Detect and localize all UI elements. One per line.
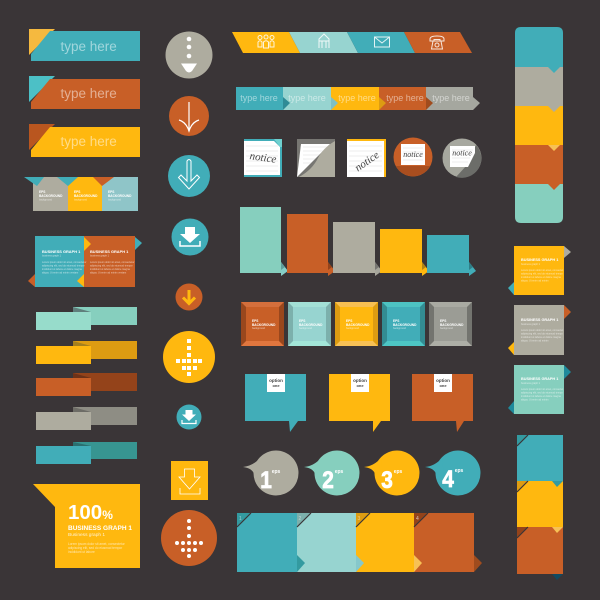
panel: yellow business graph card: BUSINESS GRAPH 1 xyxy=(521,258,558,262)
icon: yellow square outline download xyxy=(171,461,208,500)
ribbon: orange type here: type here xyxy=(60,86,117,101)
bevel square: mint: background xyxy=(299,327,313,330)
speech box: teal option one: one xyxy=(272,383,280,388)
two-column business graph panel: business graph 1 xyxy=(42,254,62,258)
panel: yellow business graph card xyxy=(508,246,571,295)
numbered bubble 4: eps xyxy=(455,468,464,474)
chevron type here band: type here xyxy=(338,93,376,103)
numbered bubble 1 xyxy=(243,450,298,496)
chevron type here band: type here xyxy=(432,93,470,103)
three-column EPS background strip: background xyxy=(39,198,53,202)
ribbon: yellow type here: type here xyxy=(60,134,117,149)
panel: yellow business graph card: business graph 1 xyxy=(521,263,541,266)
bevel square: yellow: background xyxy=(346,327,360,330)
three-column EPS background strip xyxy=(24,177,138,211)
three-column EPS background strip: background xyxy=(108,198,122,202)
two-column business graph panel: BUSINESS GRAPH 1 xyxy=(90,249,129,254)
bevel square: orange: EPS xyxy=(252,319,258,323)
note: grey circle notice: notice xyxy=(452,148,472,158)
icon: small orange circle yellow arrow xyxy=(176,284,202,310)
numbered bubble 3: eps xyxy=(394,469,403,475)
two-column business graph panel: adipiscing elit, sed do eiusmod tempor xyxy=(90,264,133,268)
panel: yellow business graph card: Lorem ipsum dolor sit amet, consectet xyxy=(521,269,564,272)
bevel square: orange: background xyxy=(252,327,266,330)
icon: envelope xyxy=(374,37,390,47)
icon: teal circle outline arrow xyxy=(168,155,210,197)
two-column business graph panel: incididunt ut labore et dolore magna xyxy=(90,268,130,271)
icon: people xyxy=(258,35,274,48)
panel: mint business graph card xyxy=(508,365,571,414)
panel: mint business graph card: adipiscing elit, sed do eiusmod tempo xyxy=(521,392,563,394)
panel: yellow business graph card: aliqua. Ut enim ad minim xyxy=(521,280,549,282)
panel: mint business graph card: business graph 1 xyxy=(521,382,541,385)
panel: mint business graph card: aliqua. Ut enim ad minim xyxy=(521,398,549,402)
icon: teal circle download xyxy=(172,218,208,256)
speech box: orange option one xyxy=(412,374,473,432)
panel: mint business graph card: BUSINESS GRAPH 1 xyxy=(521,377,558,381)
note: yellow square notice xyxy=(347,139,386,177)
three-column EPS background strip: EPS xyxy=(108,190,114,194)
panel: grey business graph card: Lorem ipsum dolor sit amet, consectet xyxy=(521,329,564,332)
bar chart: descending folded columns xyxy=(240,207,476,276)
icon: orange circle thin arrow xyxy=(169,96,209,136)
numbered bubble 1: eps xyxy=(272,469,281,475)
numbered bubble 2 xyxy=(304,450,360,496)
panel: yellow business graph card: incididunt ut labore et dolore magna xyxy=(521,276,561,279)
three-column EPS background strip: BACKGROUND xyxy=(74,194,98,198)
two-column business graph panel: aliqua. Ut enim ad minim veniam xyxy=(90,272,126,274)
three-column EPS background strip: EPS xyxy=(74,190,80,194)
icon: grey circle dotted arrow xyxy=(166,32,212,78)
bevel square: yellow: BACKGROUND xyxy=(346,323,370,327)
ribbon: teal type here: type here xyxy=(60,39,117,54)
numbered bubble 3: 3 xyxy=(381,465,393,493)
bevelled squares row xyxy=(241,302,472,346)
bevel square: grey: BACKGROUND xyxy=(440,323,464,327)
panel: 100% business graph: adipiscing elit, sed do eiusmod tempor xyxy=(68,546,123,550)
panel: grey business graph card: business graph 1 xyxy=(521,323,541,326)
bevel square: mint: EPS xyxy=(299,319,305,323)
bevel square: yellow: EPS xyxy=(346,319,352,323)
chevron type here band: type here xyxy=(240,93,278,103)
speech box: orange option one: option xyxy=(436,378,450,383)
icon: orange circle dotted arrow xyxy=(161,510,217,566)
bevel square: orange xyxy=(241,302,284,346)
bevel square: grey: background xyxy=(440,327,454,330)
panel: 100% business graph: Lorem ipsum dolor sit amet, consectetur xyxy=(68,542,126,546)
vertical rounded stacked strip xyxy=(515,27,563,223)
two-column business graph panel: business graph 1 xyxy=(90,254,110,258)
two-column business graph panel: Lorem ipsum dolor sit amet, consectetur xyxy=(90,261,135,264)
bevel square: mint xyxy=(288,302,331,346)
speech box: yellow option one: one xyxy=(356,383,364,388)
bevel square: grey xyxy=(429,302,472,346)
numbered bubble 2: eps xyxy=(335,469,344,475)
numbered bubble 4 xyxy=(425,450,480,496)
note: teal square notice: notice xyxy=(249,150,277,166)
speech box: yellow option one xyxy=(329,374,390,432)
three-column EPS background strip: background xyxy=(74,198,88,202)
icon: telephone xyxy=(430,36,444,49)
speech box: teal option one: option xyxy=(269,378,283,383)
panel: 100% business graph xyxy=(33,484,140,568)
panel: grey business graph card: aliqua. Ut enim ad minim xyxy=(521,340,549,342)
numbered bubble 1: 1 xyxy=(260,465,272,493)
bevel square: teal xyxy=(382,302,425,346)
ribbon: yellow type here xyxy=(29,124,140,157)
bevel square: mint: BACKGROUND xyxy=(299,323,323,327)
note: orange circle notice: notice xyxy=(403,150,423,159)
three-column EPS background strip: BACKGROUND xyxy=(39,194,63,198)
note: yellow square notice: notice xyxy=(353,149,382,174)
note: orange circle notice xyxy=(394,138,432,176)
two-column business graph panel: incididunt ut labore et dolore magna xyxy=(42,268,82,271)
panel: 100% business graph: incididunt ut labore xyxy=(68,550,95,554)
parallelogram icon band xyxy=(232,32,472,53)
three-column EPS background strip: BACKGROUND xyxy=(108,194,132,198)
two-column business graph panel: Lorem ipsum dolor sit amet, consectetur xyxy=(42,261,87,264)
speech box: orange option one: one xyxy=(439,383,447,388)
speech box: yellow option one: option xyxy=(353,378,367,383)
icon: house xyxy=(319,34,329,48)
bevel square: grey: EPS xyxy=(440,319,446,323)
folded ribbons stack xyxy=(36,307,137,464)
panel: mint business graph card: Lorem ipsum dolor sit amet, consectet xyxy=(521,388,564,391)
horizontal numbered tabs: 4 xyxy=(416,516,419,522)
two-column business graph panel: adipiscing elit, sed do eiusmod tempor xyxy=(42,264,85,268)
two-column business graph panel: BUSINESS GRAPH 1 xyxy=(42,249,81,254)
panel: grey business graph card: BUSINESS GRAPH 1 xyxy=(521,318,558,322)
horizontal numbered tabs: 3 xyxy=(358,516,360,522)
chevron type here band: type here xyxy=(386,93,424,103)
ribbon: orange type here xyxy=(29,76,140,109)
note: teal square notice xyxy=(244,139,282,177)
vertical numbered tabs xyxy=(517,435,563,580)
numbered bubble 2: 2 xyxy=(322,465,334,493)
bevel square: teal: BACKGROUND xyxy=(393,323,417,327)
bevel square: yellow xyxy=(335,302,378,346)
panel: grey business graph card: adipiscing elit, sed do eiusmod tempo xyxy=(521,332,563,336)
bevel square: teal: EPS xyxy=(393,319,399,323)
bevel square: teal: background xyxy=(393,327,407,330)
panel: mint business graph card: incididunt ut labore et dolore magna xyxy=(521,395,561,398)
panel: 100% business graph: 100% xyxy=(68,501,113,524)
chevron type here band xyxy=(236,87,480,110)
two-column business graph panel xyxy=(28,236,142,287)
note: grey square page xyxy=(297,139,335,177)
ribbon: teal type here xyxy=(29,29,140,61)
bevel square: orange: BACKGROUND xyxy=(252,323,276,327)
panel: grey business graph card: incididunt ut labore et dolore magna xyxy=(521,336,561,339)
icon: small teal circle download xyxy=(176,404,202,430)
chevron type here band: type here xyxy=(288,93,326,103)
horizontal numbered tabs: 1 xyxy=(239,516,242,522)
numbered bubble 3 xyxy=(364,450,420,496)
speech box: teal option one xyxy=(245,374,306,432)
horizontal numbered tabs: 2 xyxy=(298,516,302,522)
three-column EPS background strip: EPS xyxy=(39,190,45,194)
note: grey circle notice xyxy=(442,138,482,178)
icon: yellow circle pixel arrow xyxy=(163,331,215,383)
panel: 100% business graph: Business graph 1 xyxy=(68,532,105,538)
panel: grey business graph card xyxy=(508,305,571,355)
two-column business graph panel: aliqua. Ut enim ad minim veniam xyxy=(42,272,78,274)
numbered bubble 4: 4 xyxy=(442,464,454,492)
panel: yellow business graph card: adipiscing elit, sed do eiusmod tempo xyxy=(521,272,563,276)
panel: 100% business graph: BUSINESS GRAPH 1 xyxy=(68,525,132,532)
horizontal numbered tabs xyxy=(237,513,482,572)
